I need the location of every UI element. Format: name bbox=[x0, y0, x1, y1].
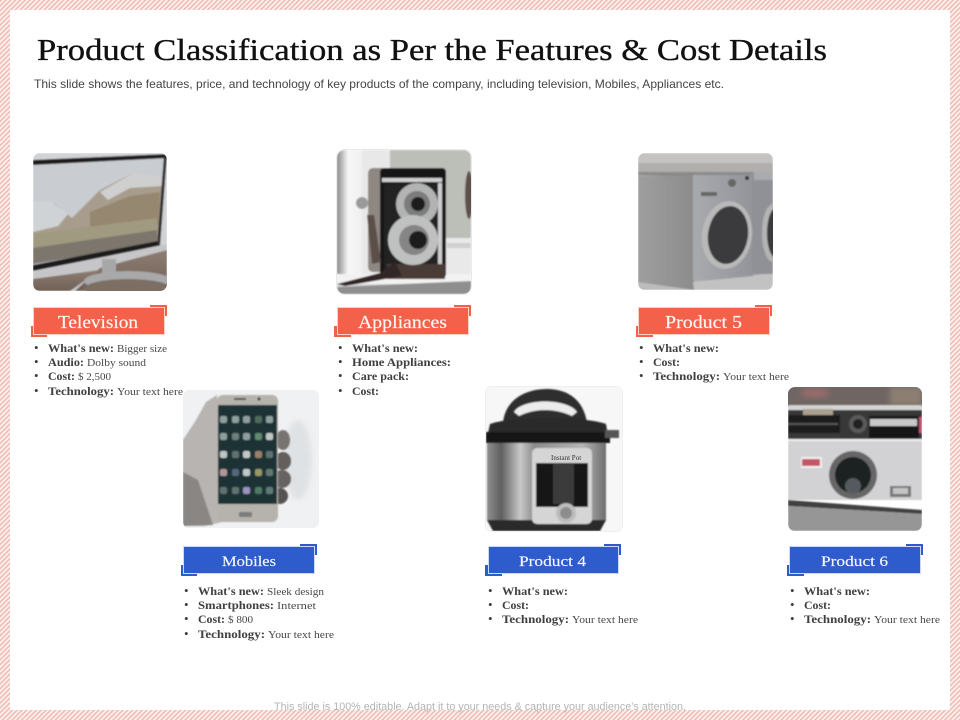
list: product 5: • bbox=[639, 368, 644, 383]
banner: appliances bbox=[334, 305, 471, 337]
banner: product 5 bbox=[636, 305, 772, 337]
list: product 4: Your text here bbox=[572, 615, 638, 626]
list: television: What's new: bbox=[48, 343, 114, 355]
list: mobiles: Internet bbox=[277, 601, 316, 612]
list: product 5: Cost: bbox=[653, 357, 680, 369]
list: television: $ 2,500 bbox=[78, 372, 111, 383]
photo: pressure cooker: Instant Pot bbox=[551, 454, 581, 462]
list: product 5: Your text here bbox=[723, 372, 789, 383]
list: product 6: Cost: bbox=[804, 600, 831, 612]
list: mobiles bbox=[184, 583, 334, 641]
list: product 5: What's new: bbox=[653, 343, 719, 355]
photo outline: pressure cooker bbox=[486, 386, 622, 532]
photo: instant camera bbox=[788, 387, 922, 531]
list: mobiles: Cost: bbox=[198, 614, 225, 626]
banner: appliances: Appliances bbox=[358, 312, 447, 332]
banner: mobiles: Mobiles bbox=[222, 554, 276, 570]
list: appliances: • bbox=[338, 340, 343, 355]
list: appliances: Cost: bbox=[352, 386, 379, 398]
list: mobiles: What's new: bbox=[198, 586, 264, 598]
list: mobiles: Sleek design bbox=[267, 587, 325, 598]
list: television: • bbox=[34, 383, 39, 398]
photo outline: appliances bbox=[336, 150, 472, 294]
list: product 6 bbox=[790, 583, 940, 626]
list: product 4: Cost: bbox=[502, 600, 529, 612]
list: product 5 bbox=[639, 340, 789, 383]
list: product 6: What's new: bbox=[804, 586, 870, 598]
list: product 4: What's new: bbox=[502, 586, 568, 598]
list: television: • bbox=[34, 354, 39, 369]
list: television: Your text here bbox=[117, 387, 183, 398]
list: television: Technology: bbox=[48, 386, 114, 398]
list: television bbox=[34, 340, 183, 398]
list: mobiles: Technology: bbox=[198, 629, 265, 641]
list: product 6: • bbox=[790, 611, 795, 626]
list: television: Dolby sound bbox=[87, 358, 147, 369]
list: appliances: What's new: bbox=[352, 343, 418, 355]
list: television: Cost: bbox=[48, 371, 75, 383]
list: television: • bbox=[34, 368, 39, 383]
photo: washing machine bbox=[638, 153, 785, 290]
banner: product 6 bbox=[787, 544, 923, 576]
list: appliances: Home Appliances: bbox=[352, 357, 451, 369]
photo: television bbox=[33, 153, 172, 299]
photo: mobile phone in hand bbox=[183, 390, 319, 528]
list: product 4: • bbox=[488, 583, 493, 598]
list: television: • bbox=[34, 340, 39, 355]
list: product 5: Technology: bbox=[653, 371, 720, 383]
banner: mobiles bbox=[181, 544, 317, 576]
list: product 4: Technology: bbox=[502, 614, 569, 626]
list: product 4: • bbox=[488, 611, 493, 626]
banner: product 4 bbox=[485, 544, 621, 576]
title: Product Classification as Per the Features & Cost Details bbox=[37, 32, 827, 67]
list: product 5: • bbox=[639, 340, 644, 355]
list: product 6: • bbox=[790, 597, 795, 612]
list: mobiles: Your text here bbox=[268, 630, 334, 641]
list: appliances: • bbox=[338, 368, 343, 383]
banner: television bbox=[31, 305, 167, 337]
subtitle: This slide shows the features, price, and technology of key products of the company, including television, Mobiles, Appliances etc. bbox=[34, 77, 724, 91]
footer note: This slide is 100% editable. Adapt it to your needs & capture your audience's attention. bbox=[274, 701, 686, 713]
list: product 6: Your text here bbox=[874, 615, 940, 626]
list: mobiles: • bbox=[184, 626, 189, 641]
list: product 4 bbox=[488, 583, 638, 626]
banner: product 4: Product 4 bbox=[519, 554, 587, 570]
banner: product 6: Product 6 bbox=[821, 554, 889, 570]
list: appliances bbox=[338, 340, 451, 398]
list: mobiles: • bbox=[184, 597, 189, 612]
list: mobiles: Smartphones: bbox=[198, 600, 274, 612]
list: product 6: • bbox=[790, 583, 795, 598]
list: appliances: Care pack: bbox=[352, 371, 409, 383]
list: mobiles: • bbox=[184, 611, 189, 626]
list: mobiles: • bbox=[184, 583, 189, 598]
banner: television: Television bbox=[58, 312, 138, 332]
list: appliances: • bbox=[338, 383, 343, 398]
list: product 6: Technology: bbox=[804, 614, 871, 626]
banner: product 5: Product 5 bbox=[665, 312, 742, 332]
photo: pressure cooker bbox=[486, 387, 622, 531]
list: product 5: • bbox=[639, 354, 644, 369]
list: product 4: • bbox=[488, 597, 493, 612]
list: appliances: • bbox=[338, 354, 343, 369]
list: television: Audio: bbox=[48, 357, 84, 369]
list: television: Bigger size bbox=[117, 344, 167, 355]
list: mobiles: $ 800 bbox=[228, 615, 253, 626]
photo: appliances twin-lens camera bbox=[337, 150, 473, 294]
